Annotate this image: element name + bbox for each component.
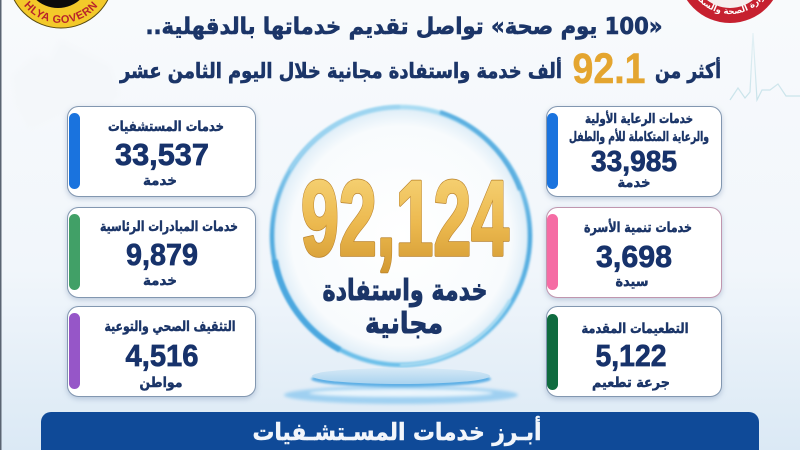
panel: presidential initiatives: 9,879 xyxy=(126,237,198,272)
panel: health education: 4,516 xyxy=(126,338,198,373)
panel: primary care xyxy=(546,106,722,196)
panel: vaccinations: 5,122 xyxy=(596,338,666,373)
panel: vaccinations: جرعة تطعيم xyxy=(592,375,670,391)
panel: presidential initiatives: خدمة xyxy=(143,273,177,289)
panel: health education: التثقيف الصحي والتوعية xyxy=(104,319,236,335)
central total number xyxy=(301,158,509,278)
central orb xyxy=(272,107,530,365)
heading line 2 xyxy=(119,45,721,93)
panel: vaccinations xyxy=(546,306,722,396)
heading line 2: أكثر من xyxy=(655,56,721,83)
central caption: خدمة واستفادة xyxy=(322,273,488,307)
panel: primary care: والرعاية المتكاملة للأم والطفل xyxy=(569,128,709,145)
panel: vaccinations: التطعيمات المقدمة xyxy=(582,321,688,337)
central total number: 92,124 xyxy=(301,158,509,278)
logo: ministry of health seal xyxy=(686,0,774,23)
bottom banner xyxy=(41,412,759,450)
panel: hospital services xyxy=(68,106,256,196)
panel: family planning xyxy=(546,208,722,298)
panel: family planning: 3,698 xyxy=(596,239,672,274)
podium xyxy=(284,368,518,404)
panel: health education: مواطن xyxy=(140,375,182,391)
logo: governorate seal: HLYA GOVERN xyxy=(24,0,98,23)
central caption: مجانية xyxy=(365,306,443,340)
central caption xyxy=(322,273,488,340)
panel: primary care: خدمات الرعاية الأولية xyxy=(585,110,693,127)
panel: hospital services: خدمة xyxy=(143,173,177,189)
heading line 1: «100 يوم صحة» تواصل تقديم خدماتها بالدقهلية.. xyxy=(145,14,662,40)
central total number: 92,124 xyxy=(301,158,509,278)
panel: health education xyxy=(68,306,256,396)
panel: presidential initiatives: خدمات المبادرات الرئاسية xyxy=(100,219,238,235)
panel: primary care: خدمة xyxy=(618,175,650,191)
panel: primary care: 33,985 xyxy=(591,146,677,178)
panel: family planning: خدمات تنمية الأسرة xyxy=(584,219,692,236)
panel: presidential initiatives xyxy=(68,208,256,298)
panel: hospital services: خدمات المستشفيات xyxy=(108,119,224,135)
panel: hospital services: 33,537 xyxy=(115,137,209,172)
heading line 2: 92.1 xyxy=(572,45,646,93)
bottom banner: أبـرز خدمات المسـتشـفيات xyxy=(252,416,542,446)
panel: family planning: سيدة xyxy=(616,274,648,290)
decorative heartbeat line xyxy=(730,33,800,100)
heading line 2: ألف خدمة واستفادة مجانية خلال اليوم الثامن عشر xyxy=(119,56,562,83)
